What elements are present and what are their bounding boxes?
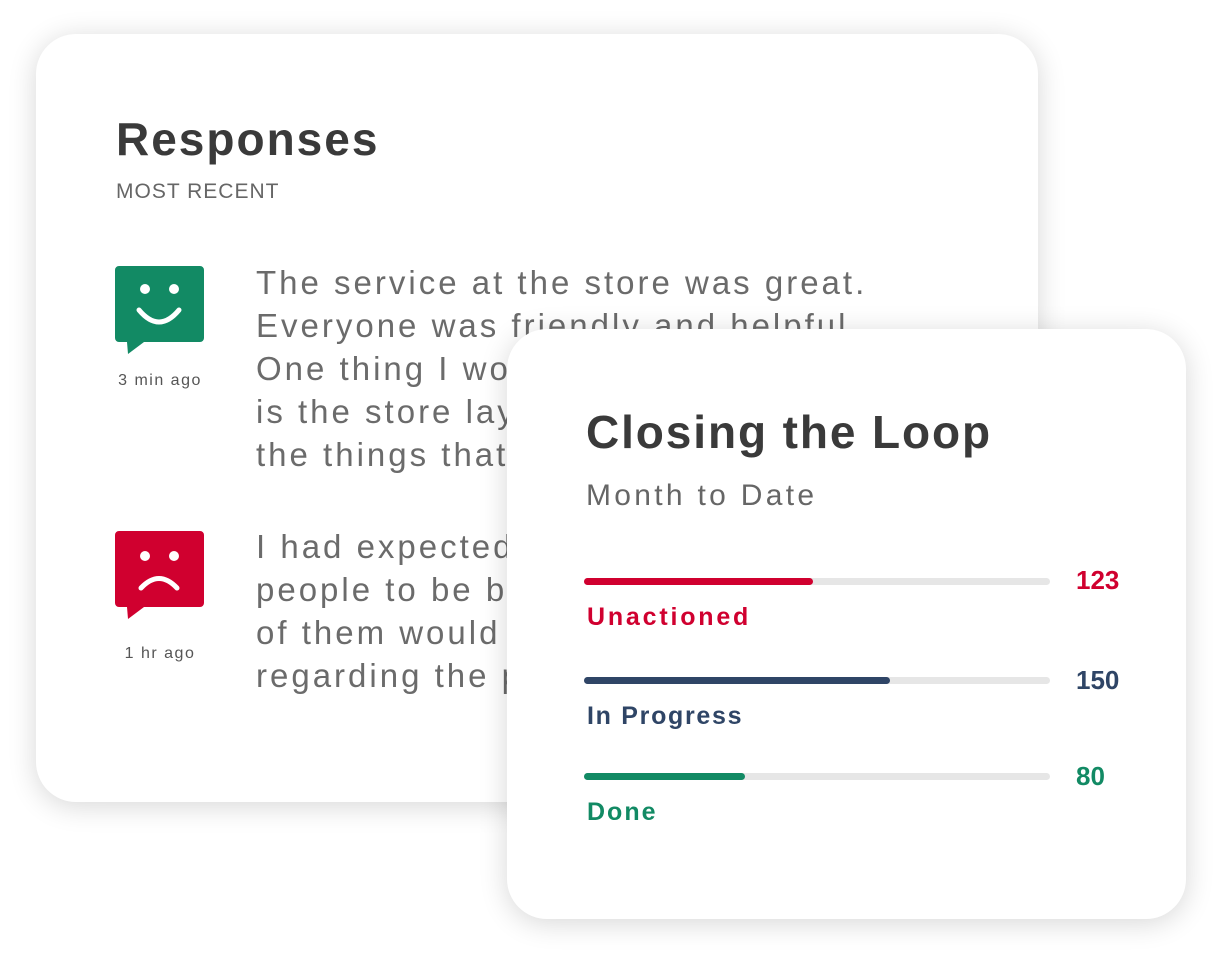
text: review 1: the things that I needed. xyxy=(256,436,685,473)
panel: closing the loop xyxy=(507,329,1186,919)
title: Responses: Responses xyxy=(116,113,379,165)
text: review 1: The service at the store was great. xyxy=(256,264,867,301)
text: review 2: I had expected more from the staff and xyxy=(256,528,936,565)
value: 80: 80 xyxy=(1076,761,1105,791)
subtitle: month to date: Month to Date xyxy=(586,479,817,512)
text: review 2: people to be better trained as none xyxy=(256,571,873,608)
subtitle: most recent: MOST RECENT xyxy=(116,180,279,203)
bar: in progress xyxy=(584,677,1050,684)
text: review 1: One thing I would like to see improved xyxy=(256,350,929,387)
icon: happy face xyxy=(115,266,204,354)
label: in progress: In Progress xyxy=(587,702,743,730)
title: Closing the Loop: Closing the Loop xyxy=(586,406,992,458)
bar: unactioned xyxy=(584,578,1050,585)
bar: done xyxy=(584,773,1050,780)
icon: sad face xyxy=(115,531,204,619)
time: 1 hr ago: 1 hr ago xyxy=(125,645,195,662)
value: 150: 150 xyxy=(1076,665,1119,695)
text: review 2: of them would answer my questions xyxy=(256,614,880,651)
text: review 1: Everyone was friendly and helpful. xyxy=(256,307,861,344)
text: review 2 xyxy=(256,528,936,694)
panel: responses xyxy=(36,34,1038,802)
text: review 1 xyxy=(256,264,929,473)
label: done: Done xyxy=(587,798,658,826)
text: review 1: is the store layout, it was hard to find xyxy=(256,393,912,430)
label: unactioned: Unactioned xyxy=(587,603,751,631)
value: 123: 123 xyxy=(1076,565,1119,595)
time: 3 min ago: 3 min ago xyxy=(118,372,202,389)
text: review 2: regarding the products in the store. xyxy=(256,657,876,694)
